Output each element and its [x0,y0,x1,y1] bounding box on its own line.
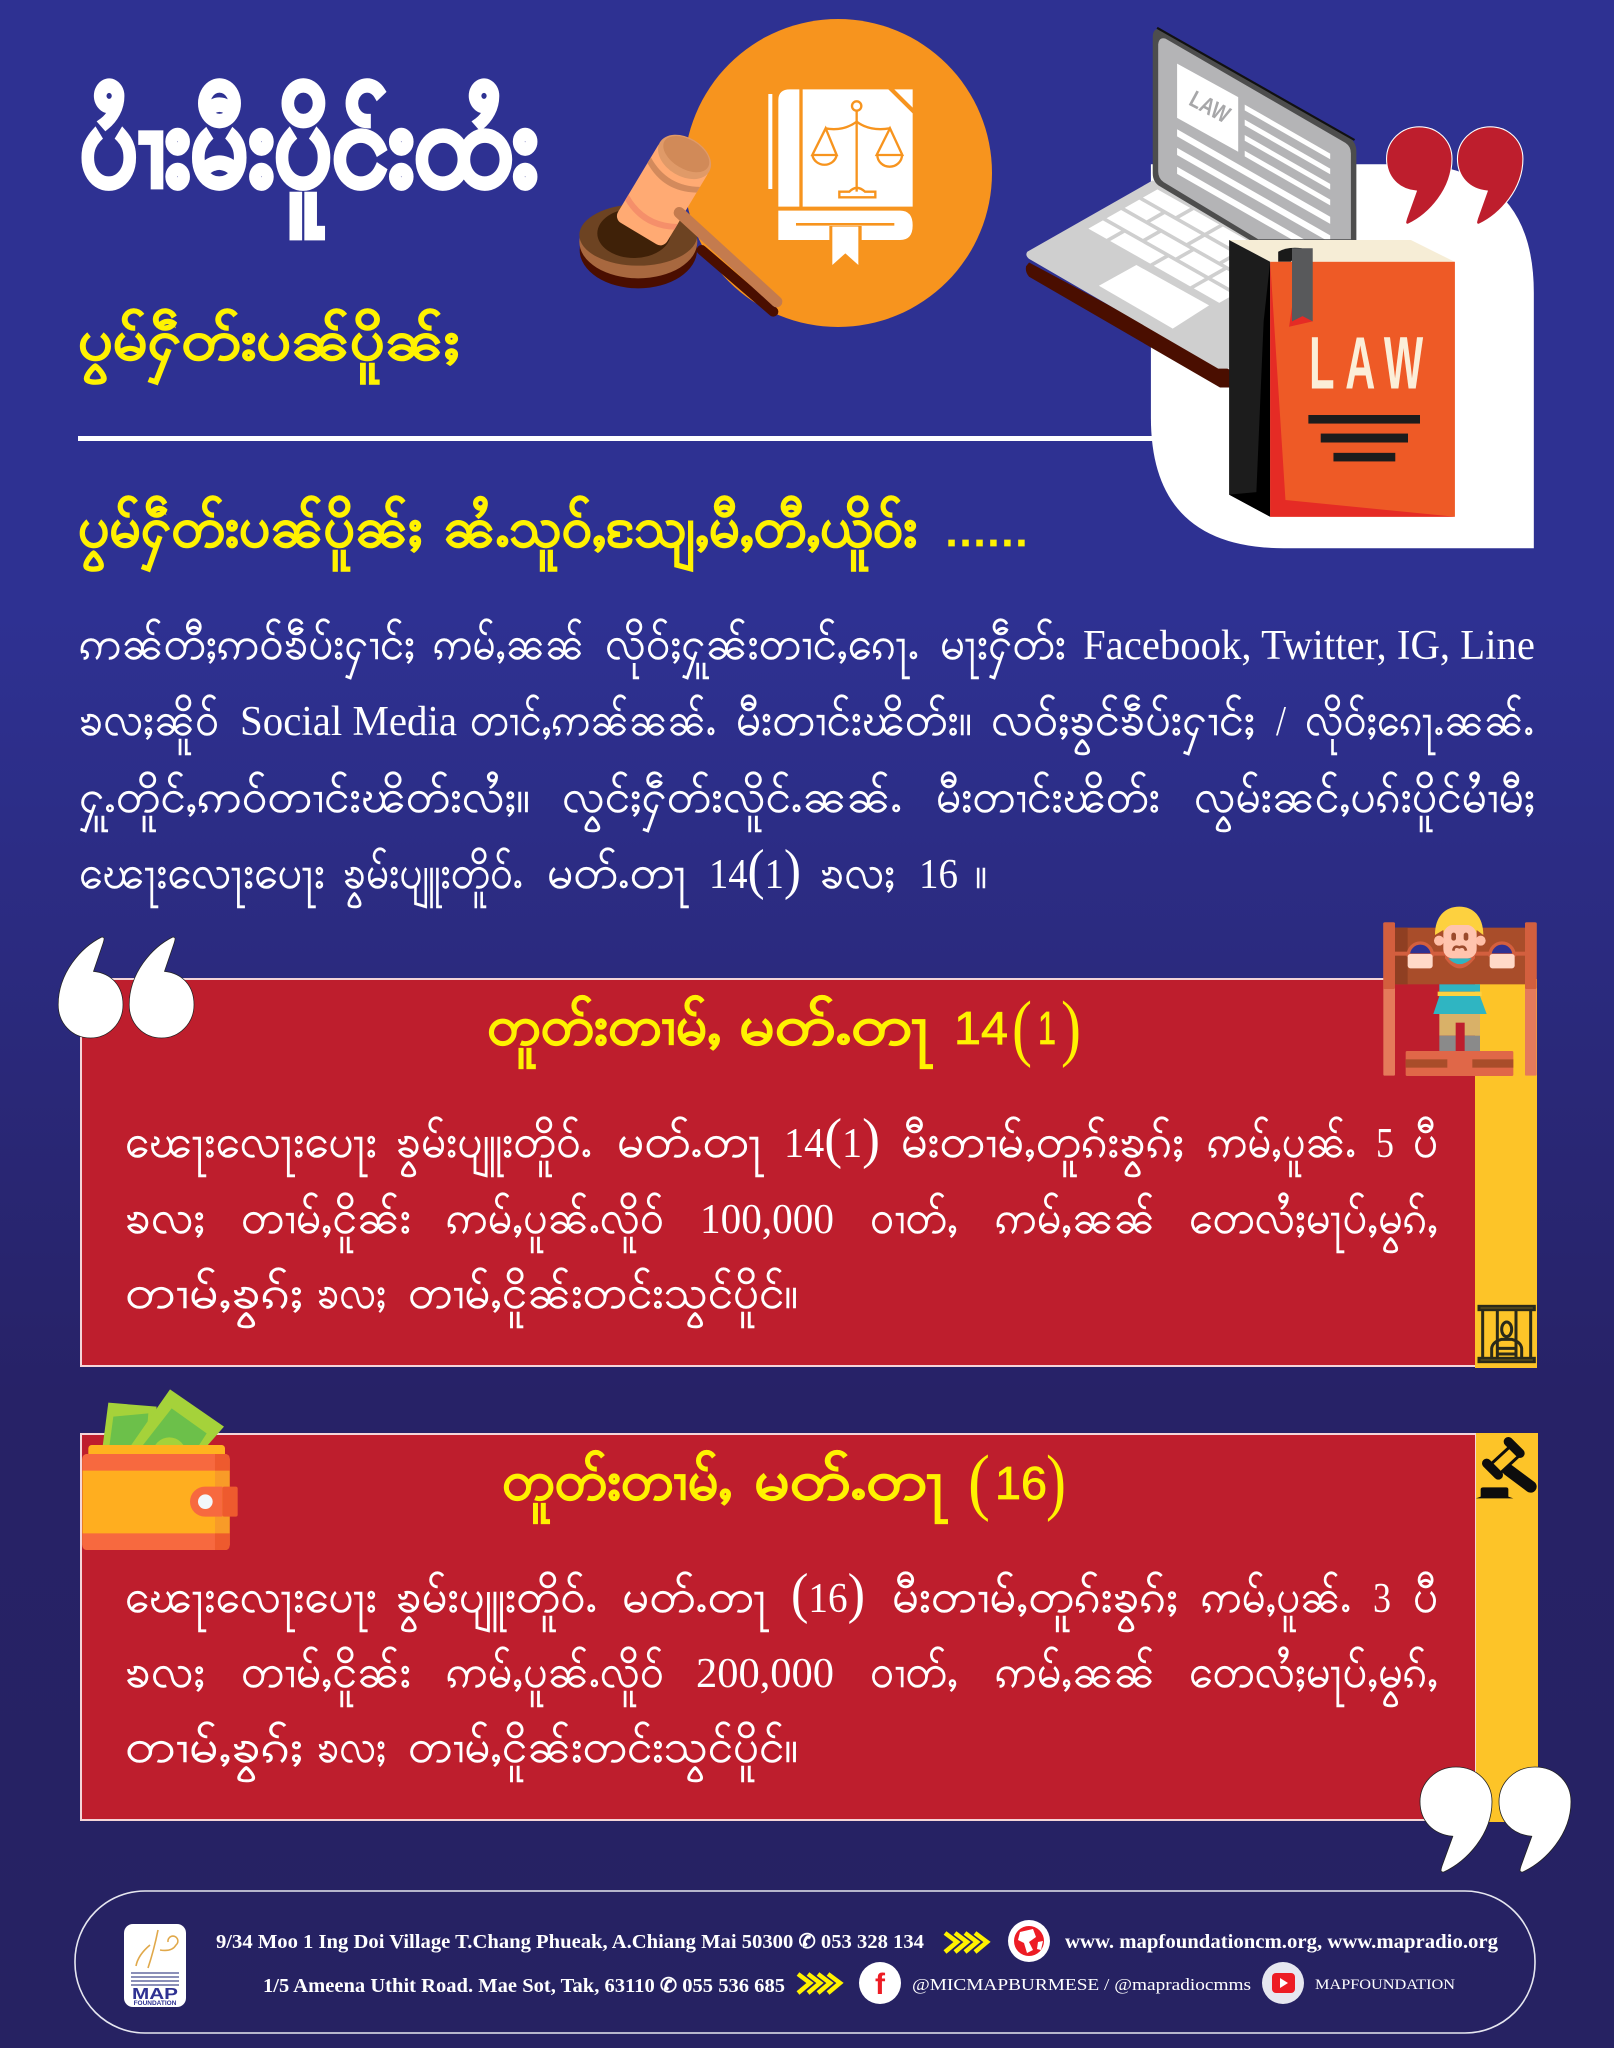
panel body line 3: တၢမ်ႇငိူၼ်းတင်းသွင်ပိူင်။ [408,1720,798,1783]
laptop [1026,28,1356,387]
panel body line 1: ၶွမ်းပျူးတိူဝ်ႉ [396,1570,597,1633]
panel body line 1: မီးတၢမ်ႇတူၵ်းၶွၵ်ႈ [892,1570,1178,1633]
paragraph line 4: ၶလႈ [820,847,895,898]
paragraph line 1: လိုဝ်ႈႁူၼ်းတၢင်ႇၵေႃႉ [605,617,919,681]
icon: globe [1008,1920,1050,1962]
panel heading [502,1441,1066,1524]
address line 1: 9/34 Moo 1 Ing Doi Village T.Chang Phueak, A.Chiang Mai 50300 ✆ 053 328 134 [216,1931,924,1953]
panel body line 3: ၶလႈ [317,1267,386,1318]
panel body line 2: ဢမ်ႇၼၼ် [995,1191,1155,1243]
paragraph line 2 [79,693,1534,757]
icon: facebook [859,1962,901,2004]
panel body line 1: ၽေႃးလေႃးပေႃး [125,1571,377,1633]
icon: wallet with banknotes [82,1389,238,1550]
panel heading: 1 [1038,1002,1056,1054]
panel body line 2: 100,000 [700,1197,834,1243]
website text: www. mapfoundationcm.org, www.mapradio.org [1065,1931,1498,1953]
white opening quote right [129,937,194,1038]
logo: MAP Foundation [124,1924,186,2007]
red law book [1229,240,1455,517]
panel body line 2 [125,1645,1438,1708]
divider line [78,436,1158,441]
youtube channel name: MAPFOUNDATION [1315,1977,1455,1993]
panel body line 2: တၢမ်ႇငိူၼ်း [241,1191,411,1254]
panel body line 2: ဢမ်ႇၼၼ် [995,1645,1155,1697]
section heading: ပွမ်ႁဵတ်းပၼ်ပိူၼ်ႈ [78,495,422,572]
paragraph line 1: Facebook, Twitter, IG, Line [1083,623,1535,669]
paragraph line 2: လဝ်ႈၶွင်ၶဵပ်းႁၢင်ႈ [991,693,1255,757]
panel heading [487,987,1081,1069]
panel body line 1: ပီ [1413,1115,1438,1167]
footer pill outline [75,1891,1535,2033]
panel background [81,979,1476,1366]
panel body line 1: ဢမ်ႇပူၼ်ႉ [1201,1570,1351,1633]
address line 2: 1/5 Ameena Uthit Road. Mae Sot, Tak, 63110 ✆ 055 536 685 [263,1975,785,1997]
panel body line 2: ဢမ်ႇပူၼ်ႉလိူဝ် [446,1645,664,1708]
icon: facebook: f [875,1968,886,2001]
paragraph line 3 [79,770,1535,834]
paragraph line 3: မီးတၢင်းၽိတ်း [936,770,1160,822]
logo wordmark MAP: MAP [132,1986,178,2003]
panel body line 1: မီးတၢမ်ႇတူၵ်းၶွၵ်ႈ [901,1115,1184,1178]
section heading [78,495,1027,572]
panel body line 1: ပီ [1413,1570,1438,1622]
arrows: yellow chevrons second row [798,1974,840,1993]
icon: youtube [1262,1962,1304,2004]
panel body line 2: တေလႆႈမႃပ်ႇမွၵ်ႇ [1189,1645,1438,1708]
panel body line 1: 14(1) [784,1108,880,1170]
panel background [81,1434,1476,1820]
paragraph line 2: Social Media [240,699,457,745]
panel body line 3: တၢမ်ႇငိူၼ်းတင်းသွင်ပိူင်။ [408,1266,798,1329]
panel body line 2: ဝၢတ်ႇ [870,1191,958,1243]
panel body line 2: ၶလႈ [125,1646,205,1697]
paragraph line 4: မတ်ႉတႃ [547,846,688,909]
panel body line 1: ဢမ်ႇပူၼ်ႉ [1207,1115,1356,1178]
paragraph line 4: 16 [919,852,958,898]
panel heading: မတ်ႉတႃ [754,1451,948,1524]
paragraph line 3: ႁူႉတိူင်ႇဢဝ်တၢင်းၽိတ်းလႆႈ။ [79,770,530,834]
paragraph line 3: လွမ်းၼင်ႇပၵ်းပိူင်မၢႆမီႈ [1194,770,1535,833]
white closing quote right [1499,1767,1571,1872]
panel body line 1 [125,1563,1438,1633]
panel: penalty article 14(1) [58,907,1537,1368]
icon: wooden gavel [579,126,777,312]
orange circle [684,19,992,327]
title: ပၢႆးမီးပိူင်းထႆး [80,80,538,238]
icon: law book with scales [768,89,913,265]
icon: prisoner behind bars [1479,1306,1534,1362]
paragraph line 4 [79,839,987,909]
screen label LAW: LAW [1185,86,1235,129]
section heading: ...... [946,511,1027,555]
panel body line 2: ဝၢတ်ႇ [870,1645,958,1697]
paragraph line 1: မႃးႁဵတ်း [940,617,1066,681]
panel body line 1: 3 [1373,1576,1391,1622]
panel heading: 14 [954,1002,1008,1054]
panel body line 2 [125,1191,1438,1254]
panel heading: ( [968,1441,990,1523]
illustration: gavel and law book on orange circle [579,19,992,327]
white rounded backdrop [1151,164,1534,548]
red quote mark right [1457,127,1523,224]
yellow side bar [1475,979,1537,1368]
white opening quote left [58,937,123,1038]
logo wordmark FOUNDATION: FOUNDATION [134,2000,177,2007]
book title LAW: LAW [1309,322,1423,405]
panel body line 1: 5 [1376,1121,1394,1167]
white closing quote left [1420,1767,1492,1872]
panel body line 3 [125,1266,798,1329]
panel body line 3 [125,1720,798,1783]
panel body line 2: တေလႆႈမႃပ်ႇမွၵ်ႇ [1189,1191,1438,1254]
intro paragraph [79,617,1535,909]
icon: black gavel [1476,1442,1531,1498]
panel body line 2: 200,000 [696,1651,834,1697]
paragraph line 2: ၶလႈၼိူဝ် [79,693,219,756]
panel: footer contact [75,1891,1535,2033]
panel body line 1 [125,1108,1438,1178]
paragraph line 4: 14(1) [709,839,801,901]
paragraph line 2: / [1276,699,1286,745]
paragraph line 4: ။ [975,847,987,898]
panel body line 1: ၽေႃးလေႃးပေႃး [125,1116,377,1178]
panel body line 1: မတ်ႉတႃ [622,1570,768,1633]
panel body line 2: ၶလႈ [125,1192,205,1243]
red quote mark left [1387,127,1452,224]
social handles: @MICMAPBURMESE / @mapradiocmms [912,1975,1251,1994]
illustration: laptop, law book and red quote marks [1026,28,1534,548]
paragraph line 1: ဢၼ်တီႈဢဝ်ၶဵပ်းႁၢင်ႈ [79,617,415,681]
panel body line 1: ၶွမ်းပျူးတိူဝ်ႉ [396,1115,592,1178]
panel body line 3: ၶလႈ [317,1721,386,1772]
paragraph line 4: ၽေႃးလေႃးပေႃး [79,847,325,909]
panel body line 3: တၢမ်ႇၶွၵ်ႈ [125,1266,303,1329]
panel body line 1: မတ်ႉတႃ [617,1115,763,1178]
panel heading: တူတ်းတၢမ်ႇ [487,996,721,1069]
panel body line 2: တၢမ်ႇငိူၼ်း [241,1645,411,1708]
subtitle: ပွမ်ႁဵတ်းပၼ်ပိူၼ်ႈ [78,308,459,385]
panel body line 3: တၢမ်ႇၶွၵ်ႈ [125,1720,303,1783]
panel body line 2: ဢမ်ႇပူၼ်ႉလိူဝ် [446,1191,664,1254]
panel: penalty article 16 [81,1389,1571,1872]
paragraph line 3: လွင်ႈႁဵတ်းလိူင်ႉၼၼ်ႉ [562,770,902,834]
paragraph line 1 [79,617,1535,681]
paragraph line 2: လိုဝ်ႈၵေႃႉၼၼ်ႉ [1305,693,1534,756]
paragraph line 1: ဢမ်ႇၼၼ် [433,617,584,669]
panel heading: ( [1012,987,1032,1069]
arrows: yellow chevrons [945,1933,987,1952]
panel body line 1: (16) [791,1563,865,1625]
panel heading: ) [1046,1441,1066,1523]
panel heading: မတ်ႉတႃ [739,996,933,1069]
panel heading: ) [1061,987,1081,1069]
yellow side bar [1476,1433,1538,1822]
panel heading: 16 [995,1457,1047,1509]
section heading: ၼႆႉသူဝ်ႇသျႄႇမီႇတီႇယိူဝ်း [443,495,917,572]
icon: person in pillory [1383,907,1537,1076]
panel heading: တူတ်းတၢမ်ႇ [502,1451,732,1524]
paragraph line 2: မီးတၢင်းၽိတ်း။ [736,693,972,745]
paragraph line 2: တၢင်ႇဢၼ်ၼၼ်ႉ [470,693,716,745]
paragraph line 4: ၶွမ်းပျူးတိူဝ်ႉ [343,846,523,909]
